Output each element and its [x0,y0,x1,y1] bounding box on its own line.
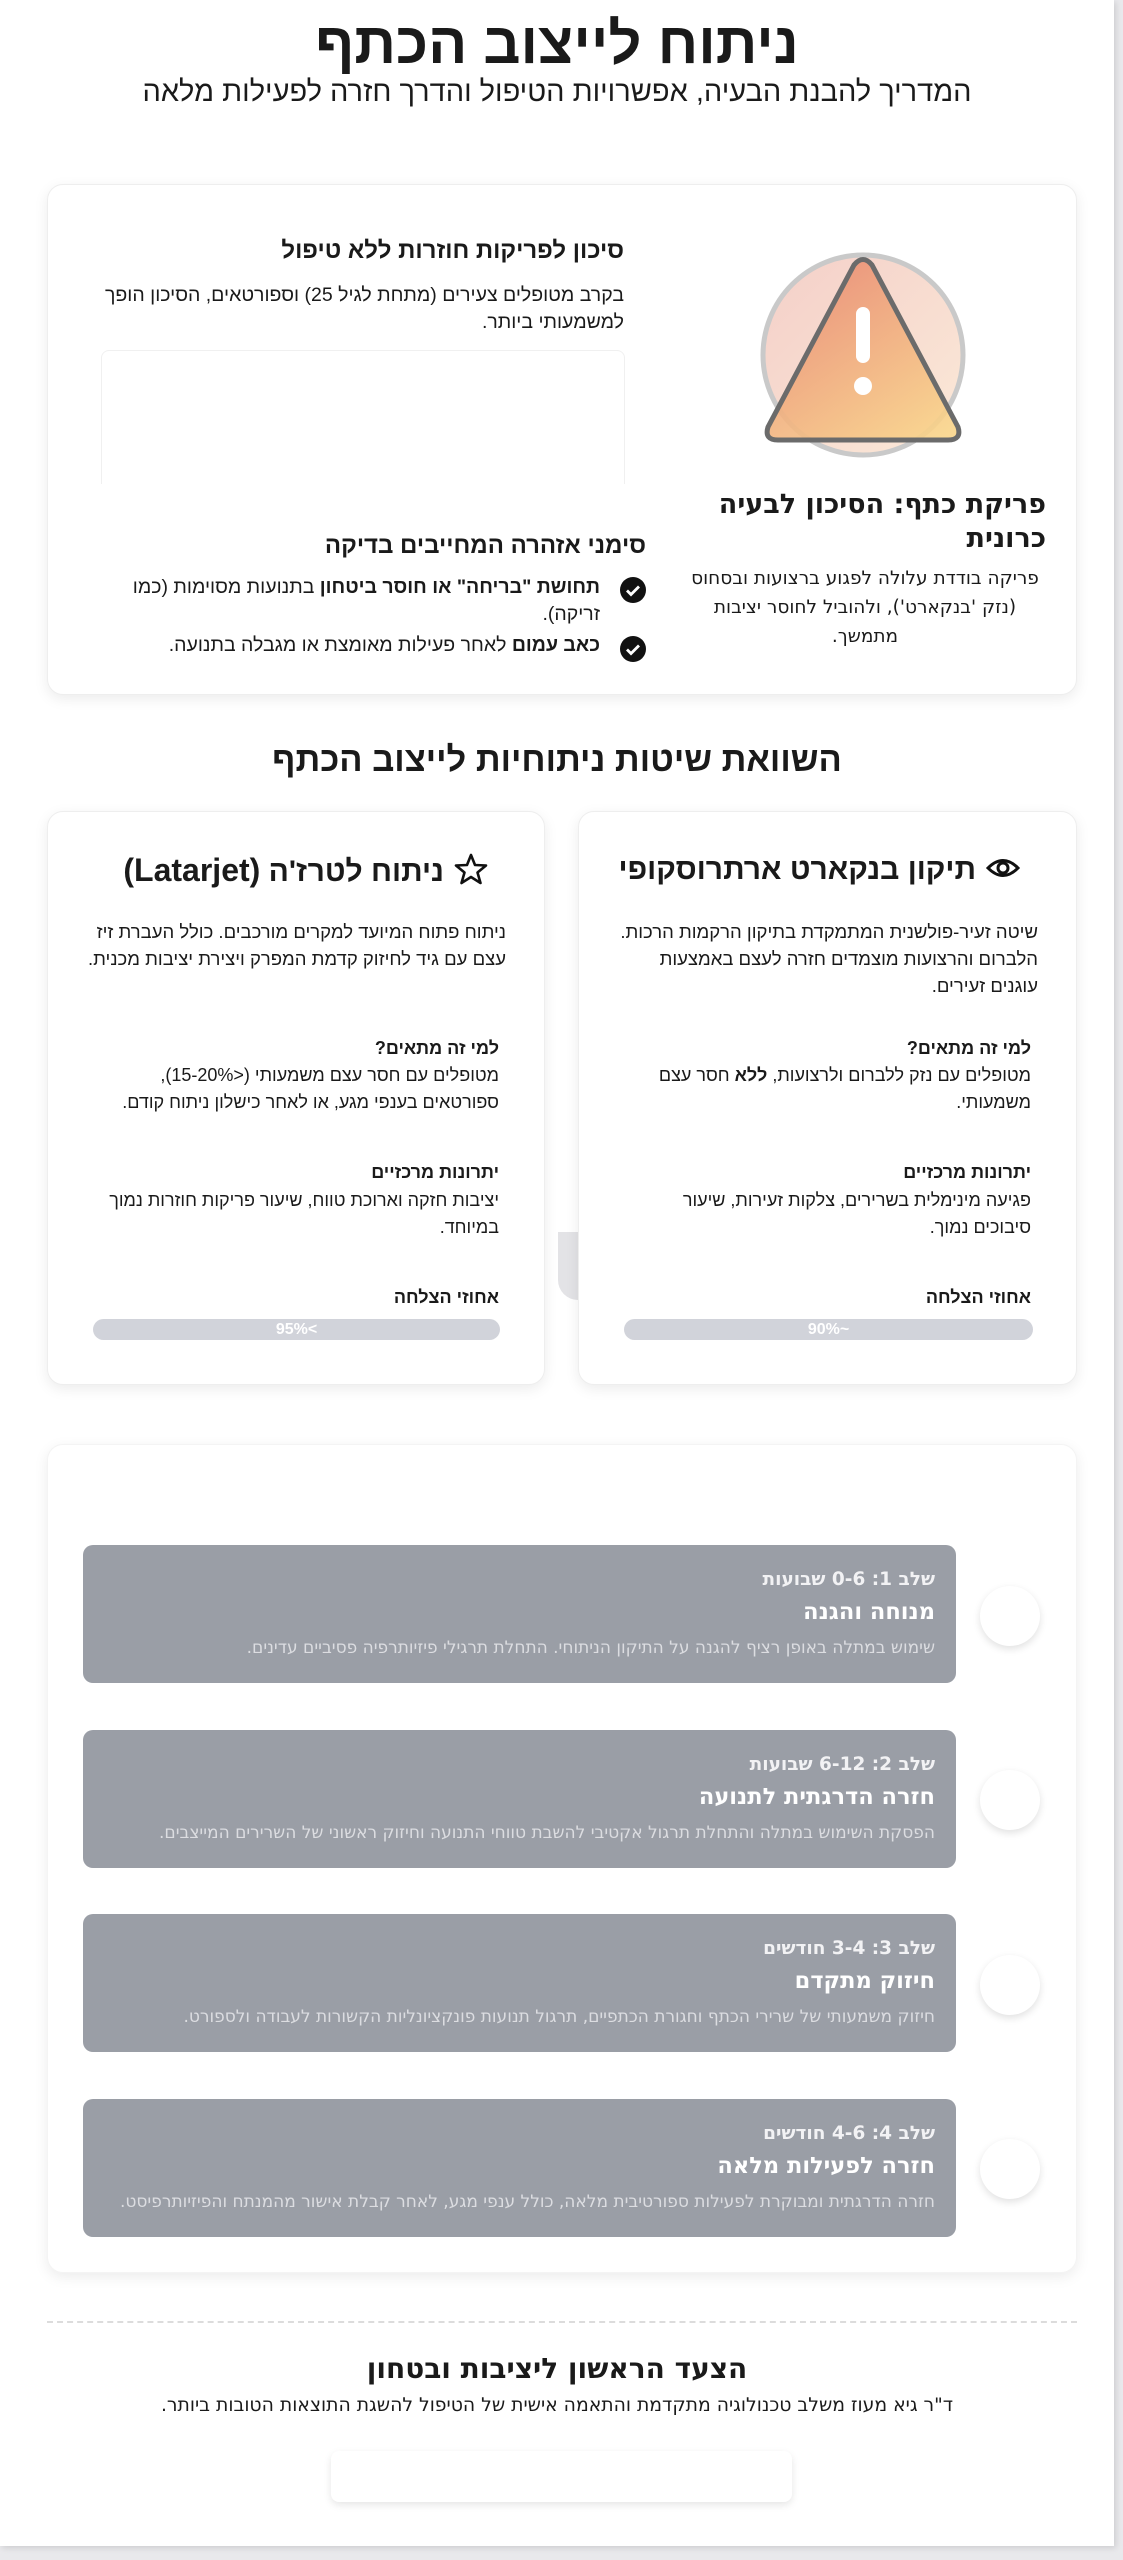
section heading: comparison: השוואת שיטות ניתוחיות לייצוב הכתף [272,741,842,779]
heading with star icon: ניתוח לטרז'ה (Latarjet) [123,852,444,888]
text: advantages: פגיעה מינימלית בשרירים, צלקות זעירות, שיעור סיבוכים נמוך. [683,1190,1031,1237]
icon: check 2 [620,636,646,662]
marker 3 [980,1955,1040,2015]
step 4: שלב 4: 4-6 חודשים [763,2123,935,2144]
heading: advantages: יתרונות מרכזיים [371,1162,499,1182]
item 1: תחושת "בריחה" או חוסר ביטחון בתנועות מסוימות (כמו זריקה). [133,576,600,625]
icon: eye [986,859,1020,877]
marker 1 [980,1586,1040,1646]
text: suitable: מטופלים עם חסר עצם משמעותי (<15-20%), ספורטאים בענפי מגע, או לאחר כישלון ניתוח קודם. [122,1065,499,1112]
panel: arthroscopic bankart [578,811,1077,1385]
footer button box [331,2451,792,2502]
marker 2 [980,1770,1040,1830]
icon: warning [760,252,966,458]
text: description: שיטה זעיר-פולשנית המתמקדת בתיקון הרקמות הרכות. הלברום והרצועות מוצמדים חזרה לעצם באמצעות עוגנים זעירים. [620,921,1038,996]
panel: rehab timeline [47,1444,1077,2273]
step 1: שלב 1: 0-6 שבועות [762,1569,935,1590]
step 3: שלב 3: 3-4 חודשים [763,1938,935,1959]
decorative gray blob behind cards [558,1232,588,1300]
text: chronic description: פריקה בודדת עלולה לפגוע ברצועות ובסחוס (נזק 'בנקארט'), ולהוביל לחוסר יציבות מתמשך. [691,568,1039,647]
bar: 90%: 90%~ [808,1321,849,1338]
heading: success: אחוזי הצלחה [394,1287,499,1307]
list: warning signs [133,576,646,662]
heading: suitable: למי זה מתאים? [375,1038,499,1058]
footer text: ד"ר גיא מעוז משלב טכנולוגיה מתקדמת והתאמה אישית של הטיפול להשגת התוצאות הטובות ביותר. [161,2395,953,2416]
step 4 [83,2099,956,2237]
marker 4 [980,2139,1040,2199]
step 1: שימוש במתלה באופן רציף להגנה על התיקון הניתוחי. התחלת תרגילי פיזיותרפיה פסיביים עדינים. [247,1638,935,1658]
step 1: מנוחה והגנה [803,1599,935,1625]
heading: advantages: יתרונות מרכזיים [903,1162,1031,1182]
bar: 95% [93,1319,500,1340]
step 3 [83,1914,956,2052]
icon: star [454,854,488,884]
panel: latarjet [47,811,545,1385]
heading with eye icon: תיקון בנקארט ארתרוסקופי [619,853,976,886]
bar: 95%: 95%< [276,1321,317,1338]
heading: recurrence risk: סיכון לפריקות חוזרות ללא טיפול [281,237,624,264]
bar: 90% [624,1319,1033,1340]
subtitle: המדריך להבנת הבעיה, אפשרויות הטיפול והדרך חזרה לפעילות מלאה [142,76,972,108]
footer heading: הצעד הראשון ליציבות ובטחון [367,2352,747,2385]
step 2 [83,1730,956,1868]
text: advantages: יציבות חזקה וארוכת טווח, שיעור פריקות חוזרות נמוך במיוחד. [109,1190,499,1237]
step 4: חזרה הדרגתית ומבוקרת לפעילות ספורטיבית מלאה, כולל ענפי מגע, לאחר קבלת אישור מהמנתח והפיזיותרפיסט. [120,2192,935,2212]
heading: warning signs: סימני אזהרה המחייבים בדיקה [325,532,646,559]
step 4: חזרה לפעילות מלאה [717,2153,935,2179]
text: recurrence: בקרב מטופלים צעירים (מתחת לגיל 25) וספורטאים, הסיכון הופך למשמעותי ביותר. [105,284,624,333]
icon: check 1 [620,577,646,603]
step 2: הפסקת השימוש במתלה והתחלת תרגול אקטיבי להשבת טווחי התנועה וחיזוק ראשוני של השרירים המייצבים. [159,1823,935,1843]
item 2: כאב עמום לאחר פעילות מאומצת או מגבלה בתנועה. [169,634,600,656]
panel: dislocation risk [47,184,1077,695]
heading: suitable: למי זה מתאים? [907,1038,1031,1058]
step 1 [83,1545,956,1683]
step 2: חזרה הדרגתית לתנועה [699,1784,935,1810]
text: suitable: מטופלים עם נזק ללברום ולרצועות, ללא חסר עצם משמעותי. [659,1065,1031,1112]
step 2: שלב 2: 6-12 שבועות [750,1754,935,1775]
empty chart box [101,350,625,484]
step 3: חיזוק מתקדם [795,1968,935,1994]
step 3: חיזוק משמעותי של שרירי הכתף וחגורת הכתפיים, תרגול תנועות פונקציונליות הקשורות לעבודה ולספורט. [183,2007,935,2027]
text: description: ניתוח פתוח המיועד למקרים מורכבים. כולל העברת זיז עצם עם גיד לחיזוק קדמת המפרק ויצירת יציבות מכנית. [88,921,506,969]
title: ניתוח לייצוב הכתף [315,11,799,76]
heading: chronic risk: פריקת כתף: הסיכון לבעיה כרונית [719,489,1046,554]
heading: success: אחוזי הצלחה [926,1287,1031,1307]
